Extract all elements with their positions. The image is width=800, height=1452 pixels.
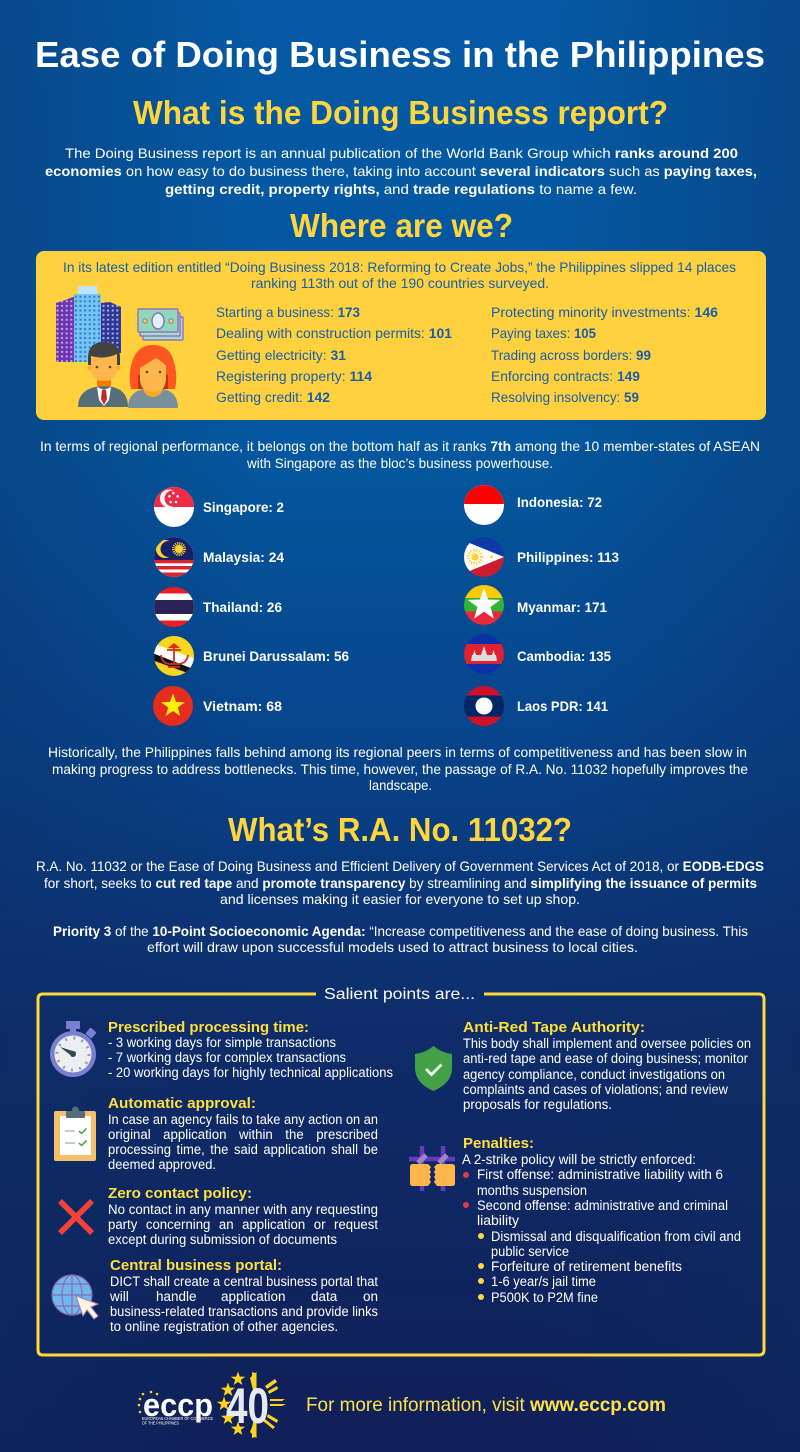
- icon: buildings, money and business people: [56, 286, 183, 408]
- list: indicator rankings left: Getting electricity: 31: [216, 347, 346, 363]
- point: anti-red tape authority: agency compliance, conduct investigations on: [463, 1067, 725, 1082]
- point: penalties: Forfeiture of retirement benefits: [491, 1259, 682, 1274]
- flag: Philippines: [462, 537, 504, 577]
- logo number 40: 40: [226, 1378, 269, 1434]
- point: automatic approval: Automatic approval:: [108, 1095, 256, 1112]
- point: prescribed processing time: - 20 working days for highly technical applications: [108, 1065, 393, 1080]
- text block: priority 3: [53, 923, 748, 955]
- point: penalties: P500K to P2M fine: [491, 1290, 598, 1305]
- point: zero contact policy: Zero contact policy:: [108, 1185, 252, 1202]
- point: anti-red tape authority: This body shall implement and oversee policies on: [463, 1036, 751, 1051]
- label: Laos: Laos PDR: 141: [517, 698, 608, 714]
- point: anti-red tape authority: proposals for regulations.: [463, 1097, 612, 1112]
- label: Indonesia: Indonesia: 72: [517, 494, 602, 510]
- point: anti-red tape authority: [463, 1019, 751, 1112]
- label: Myanmar: Myanmar: 171: [517, 599, 607, 615]
- point: penalties: [462, 1135, 741, 1305]
- point: automatic approval: deemed approved.: [108, 1157, 216, 1172]
- text block: report description: getting credit, property rights, and trade regulations to name a few.: [165, 181, 637, 197]
- icon: globe with cursor: [52, 1275, 98, 1319]
- point: zero contact policy: No contact in any manner with any requesting: [108, 1202, 378, 1217]
- point: central business portal: handle: [156, 1289, 197, 1304]
- text block: priority 3: effort will draw upon successful models used to attract business to local cities.: [147, 939, 638, 955]
- point: automatic approval: In case an agency fails to take any action on an: [108, 1112, 378, 1127]
- list: indicator rankings right: Protecting minority investments: 146: [491, 304, 718, 320]
- text block: historical competitiveness: Historically, the Philippines falls behind among its regional peers in terms of competitiveness and has been slow in: [48, 744, 747, 760]
- title: Ease of Doing Business in the Philippines: [35, 34, 765, 75]
- point: automatic approval: original application within the prescribed: [108, 1127, 378, 1142]
- text block: regional performance: [40, 438, 760, 471]
- point: penalties: Second offense: administrative and criminal: [477, 1198, 728, 1213]
- point: prescribed processing time: - 3 working days for simple transactions: [108, 1035, 336, 1050]
- point: penalties: 1-6 year/s jail time: [491, 1274, 596, 1289]
- text block: R.A. 11032 description: R.A. No. 11032 or the Ease of Doing Business and Efficient Delivery of Government Services Act of 2018, or EODB-EDGS: [36, 858, 764, 874]
- flag: Brunei: [152, 636, 196, 676]
- logo wordmark: eccp: [143, 1387, 213, 1423]
- point: central business portal: to online registration of other agencies.: [110, 1319, 338, 1334]
- point: zero contact policy: party concerning an application or request: [108, 1217, 378, 1232]
- panel title: Salient points are...: [324, 986, 475, 1003]
- point: central business portal: will: [109, 1289, 129, 1304]
- text block: historical competitiveness: [48, 744, 748, 793]
- point: prescribed processing time: Prescribed processing time:: [108, 1019, 309, 1036]
- text block: regional performance: In terms of regional performance, it belongs on the bottom half as it ranks 7th among the 10 member-states of ASEAN: [40, 438, 760, 454]
- text: latest edition summary: In its latest edition entitled “Doing Business 2018: Reforming to Create Jobs,” the Philippines slipped 14 places: [63, 259, 736, 275]
- label: Cambodia: Cambodia: 135: [517, 648, 611, 664]
- point: penalties: A 2-strike policy will be strictly enforced:: [462, 1152, 696, 1167]
- point: automatic approval: processing time, the said application shall be: [108, 1142, 378, 1157]
- label: Singapore: Singapore: 2: [203, 499, 284, 515]
- heading: what is the report: What is the Doing Business report?: [133, 94, 668, 131]
- list: indicator rankings right: [491, 304, 718, 405]
- logo wordmark: EUROPEAN CHAMBER OF COMMERCE: [142, 1416, 213, 1421]
- point: penalties: public service: [491, 1244, 569, 1259]
- point: central business portal: data: [311, 1289, 338, 1304]
- flag: Laos: [464, 686, 504, 726]
- heading: where are we: Where are we?: [290, 207, 513, 244]
- point: penalties: Dismissal and disqualification from civil and: [491, 1229, 741, 1244]
- point: zero contact policy: [108, 1185, 378, 1247]
- panel: salient points: [38, 986, 764, 1355]
- point: prescribed processing time: - 7 working days for complex transactions: [108, 1050, 346, 1065]
- text block: report description: [45, 145, 757, 197]
- point: anti-red tape authority: complaints and cases of violations; and review: [463, 1082, 728, 1097]
- list: indicator rankings left: Starting a business: 173: [216, 304, 360, 320]
- point: penalties: months suspension: [477, 1183, 587, 1198]
- list: indicator rankings right: Resolving insolvency: 59: [491, 389, 639, 405]
- text block: regional performance: with Singapore as the bloc’s business powerhouse.: [246, 455, 553, 471]
- point: central business portal: Central business portal:: [110, 1257, 282, 1274]
- list: indicator rankings left: Getting credit: 142: [216, 389, 330, 405]
- point: zero contact policy: except during submission of documents: [108, 1232, 337, 1247]
- text block: historical competitiveness: making progress to address bottlenecks. This time, however, the passage of R.A. No. 11032 hopefully improves the: [52, 761, 748, 777]
- panel: 2018 rankings: [36, 251, 766, 420]
- text block: R.A. 11032 description: for short, seeks to cut red tape and promote transparency by streamlining and simplifying the issuance of permits: [44, 875, 757, 891]
- flag: Singapore: [154, 487, 194, 527]
- logo wordmark: OF THE PHILIPPINES: [142, 1420, 179, 1426]
- list: indicator rankings right: Enforcing contracts: 149: [491, 368, 640, 384]
- text block: priority 3: Priority 3 of the 10-Point Socioeconomic Agenda: “Increase competitiveness and the ease of doing business. This: [53, 923, 748, 939]
- logo sun and stars: [217, 1372, 286, 1438]
- point: central business portal: on: [363, 1289, 378, 1304]
- label: Philippines: Philippines: 113: [517, 549, 619, 565]
- icon: fists with barbed wire: [409, 1146, 455, 1191]
- point: anti-red tape authority: anti-red tape and ease of doing business; monitor: [463, 1051, 748, 1066]
- text block: report description: economies on how easy to do business there, taking into account several indicators such as paying taxes,: [45, 163, 757, 179]
- list: indicator rankings left: Registering property: 114: [216, 368, 372, 384]
- text block: R.A. 11032 description: [36, 858, 764, 907]
- logo: ECCP 40 years: [138, 1372, 286, 1438]
- icon: shield with check: [415, 1046, 452, 1091]
- point: central business portal: application: [221, 1289, 286, 1304]
- text block: historical competitiveness: landscape.: [369, 777, 432, 793]
- list: indicator rankings left: Dealing with construction permits: 101: [216, 325, 452, 341]
- flag: Vietnam: [153, 686, 193, 726]
- list: indicator rankings right: Trading across borders: 99: [491, 347, 651, 363]
- point: central business portal: business-related transactions and provide links: [110, 1304, 378, 1319]
- icon: clipboard: [54, 1106, 96, 1161]
- text: latest edition summary: ranking 113th out of the 190 countries surveyed.: [251, 275, 549, 291]
- point: prescribed processing time: [108, 1019, 393, 1080]
- text: latest edition summary: [63, 259, 736, 291]
- point: penalties: First offense: administrative liability with 6: [477, 1167, 723, 1182]
- point: penalties: Penalties:: [463, 1135, 534, 1152]
- footer call to action: For more information, visit www.eccp.com: [306, 1394, 666, 1416]
- list: indicator rankings left: [216, 304, 452, 405]
- label: Vietnam: Vietnam: 68: [203, 698, 282, 714]
- flag: Cambodia: [464, 634, 504, 674]
- flag: Indonesia: [464, 485, 504, 525]
- label: Brunei: Brunei Darussalam: 56: [203, 648, 349, 664]
- icon: stopwatch: [50, 1021, 97, 1077]
- point: penalties: liability: [477, 1213, 519, 1228]
- label: Malaysia: Malaysia: 24: [203, 549, 284, 565]
- flag: Malaysia: [154, 537, 194, 577]
- list: indicator rankings right: Paying taxes: 105: [491, 325, 596, 341]
- point: anti-red tape authority: Anti-Red Tape Authority:: [463, 1019, 645, 1036]
- point: automatic approval: [108, 1095, 378, 1172]
- heading: what's R.A. No. 11032: What’s R.A. No. 11032?: [228, 811, 572, 848]
- chart: ASEAN country rankings: [152, 485, 619, 726]
- icon: red cross: [60, 1201, 92, 1233]
- label: Thailand: Thailand: 26: [203, 599, 282, 615]
- flag: Thailand: [154, 587, 194, 627]
- text block: R.A. 11032 description: and licenses making it easier for everyone to set up shop.: [220, 891, 580, 907]
- flag: Myanmar: [464, 585, 504, 626]
- point: central business portal: DICT shall create a central business portal that: [110, 1274, 378, 1289]
- point: central business portal: [109, 1257, 378, 1334]
- text block: report description: The Doing Business report is an annual publication of the World Bank Group which ranks around 200: [65, 145, 738, 161]
